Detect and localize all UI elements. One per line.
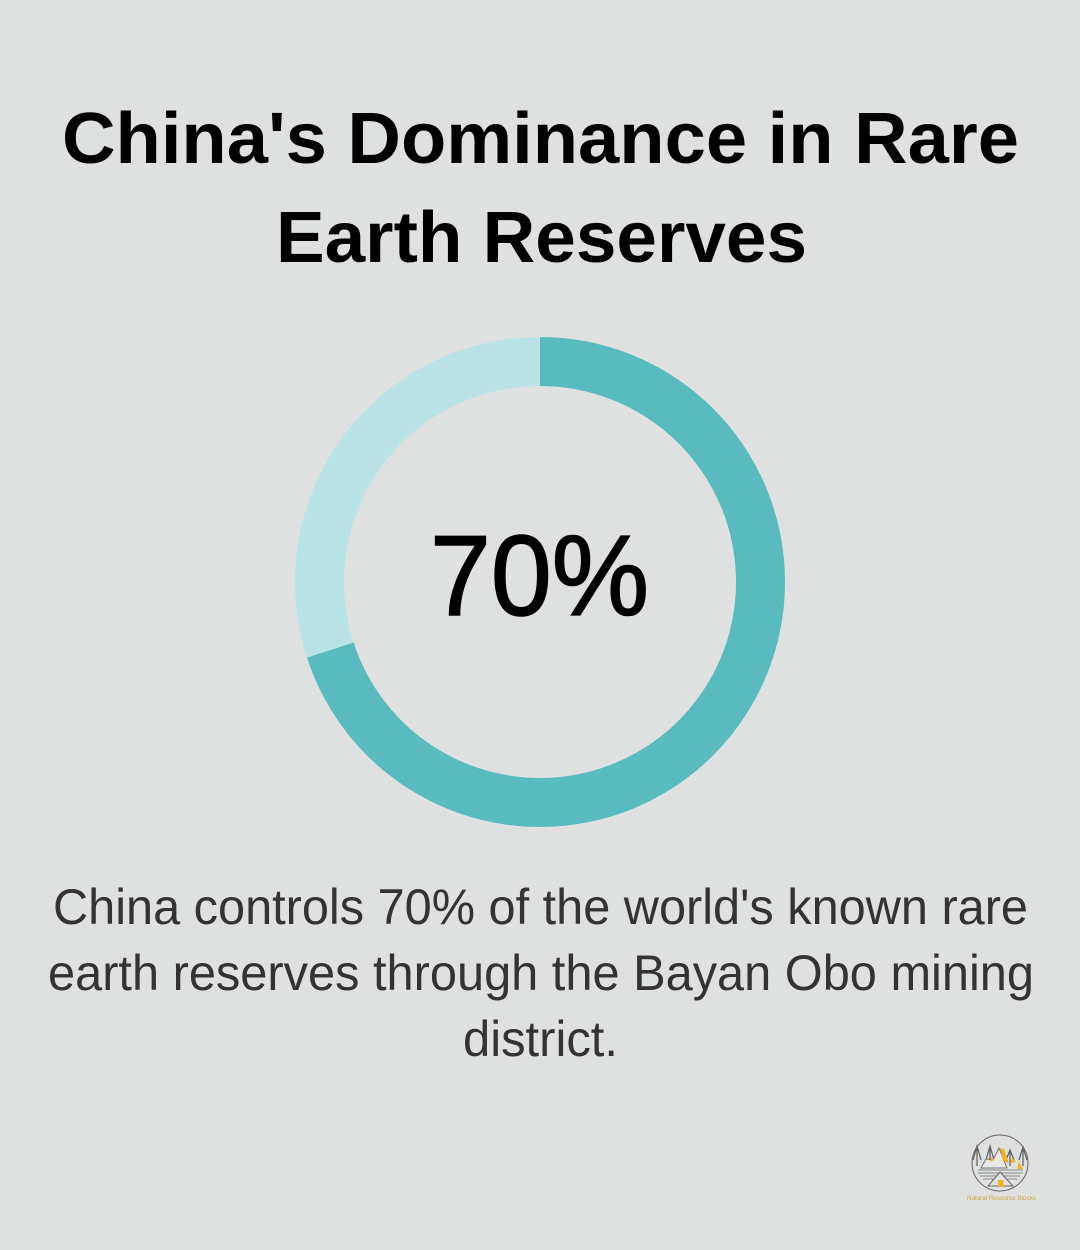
logo cabin bbox=[988, 1172, 1013, 1186]
logo mountains bbox=[981, 1148, 1007, 1168]
logo water lines bbox=[978, 1170, 1023, 1179]
donut chart: 70% bbox=[320, 362, 761, 802]
logo ring bbox=[972, 1135, 1028, 1191]
title: Earth Reserves bbox=[276, 198, 807, 278]
description text: China controls 70% of the world's known rare bbox=[53, 879, 1028, 935]
donut value: 70% bbox=[430, 513, 649, 640]
logo: Natural Resource Stocks bbox=[967, 1135, 1037, 1202]
title bbox=[62, 99, 1019, 278]
description text: earth reserves through the Bayan Obo mining bbox=[48, 945, 1034, 1001]
description text bbox=[48, 879, 1034, 1067]
description text: district. bbox=[463, 1011, 618, 1067]
logo caption: Natural Resource Stocks bbox=[967, 1195, 1037, 1202]
logo trees bbox=[973, 1146, 1027, 1166]
title: China's Dominance in Rare bbox=[62, 99, 1019, 179]
